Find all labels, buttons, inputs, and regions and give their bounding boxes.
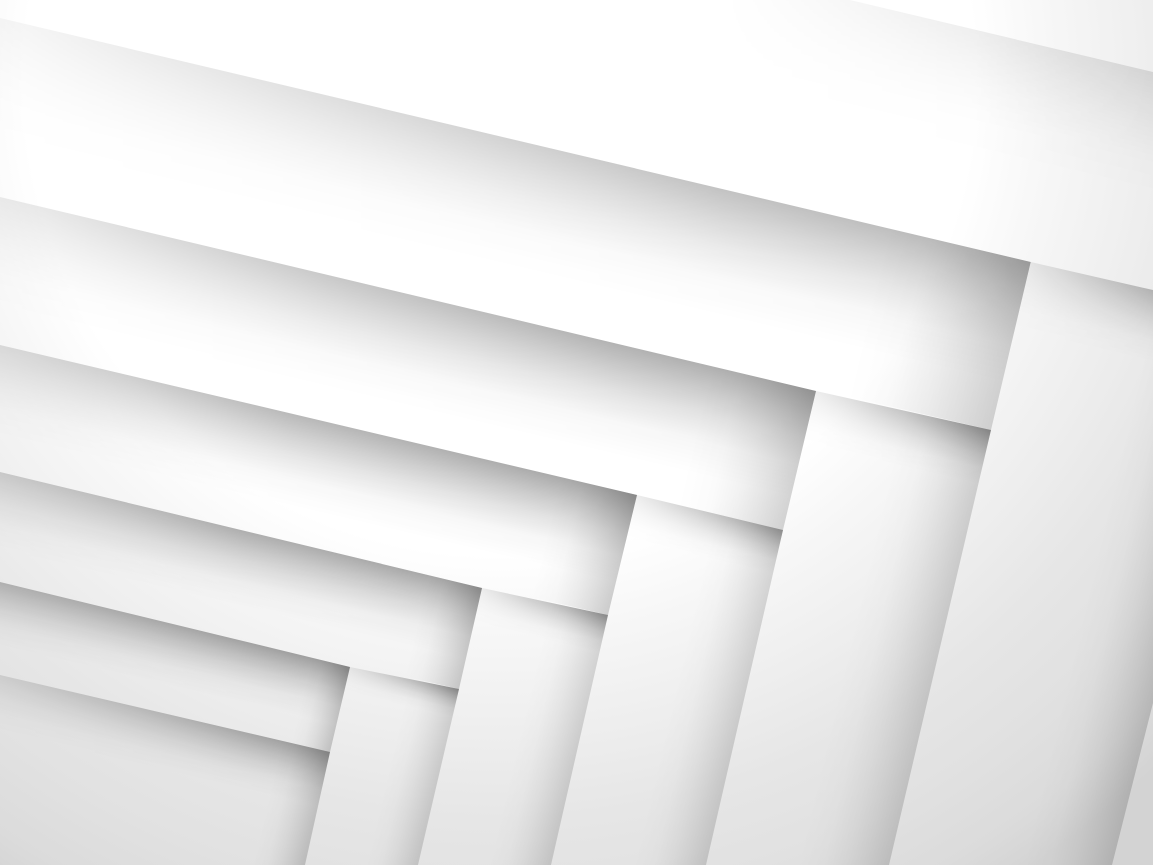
panel: vertical strip 1 (1026, 262, 1153, 865)
panel: bottom-left strip (0, 675, 330, 865)
panel: vertical strip 4 (480, 588, 608, 865)
panel: vertical strip 2 (812, 391, 991, 865)
panel: vertical strip 5 (348, 667, 459, 865)
panel: horizontal strip 2 (0, 197, 816, 530)
panel: vertical strip 3 (634, 495, 783, 865)
panel: horizontal strip 4 (0, 472, 482, 689)
panel: top strip (852, 0, 1153, 133)
panel: horizontal strip 1 (0, 18, 1031, 430)
panel: horizontal strip 3 (0, 345, 637, 615)
panel: horizontal strip 5 (0, 582, 350, 752)
